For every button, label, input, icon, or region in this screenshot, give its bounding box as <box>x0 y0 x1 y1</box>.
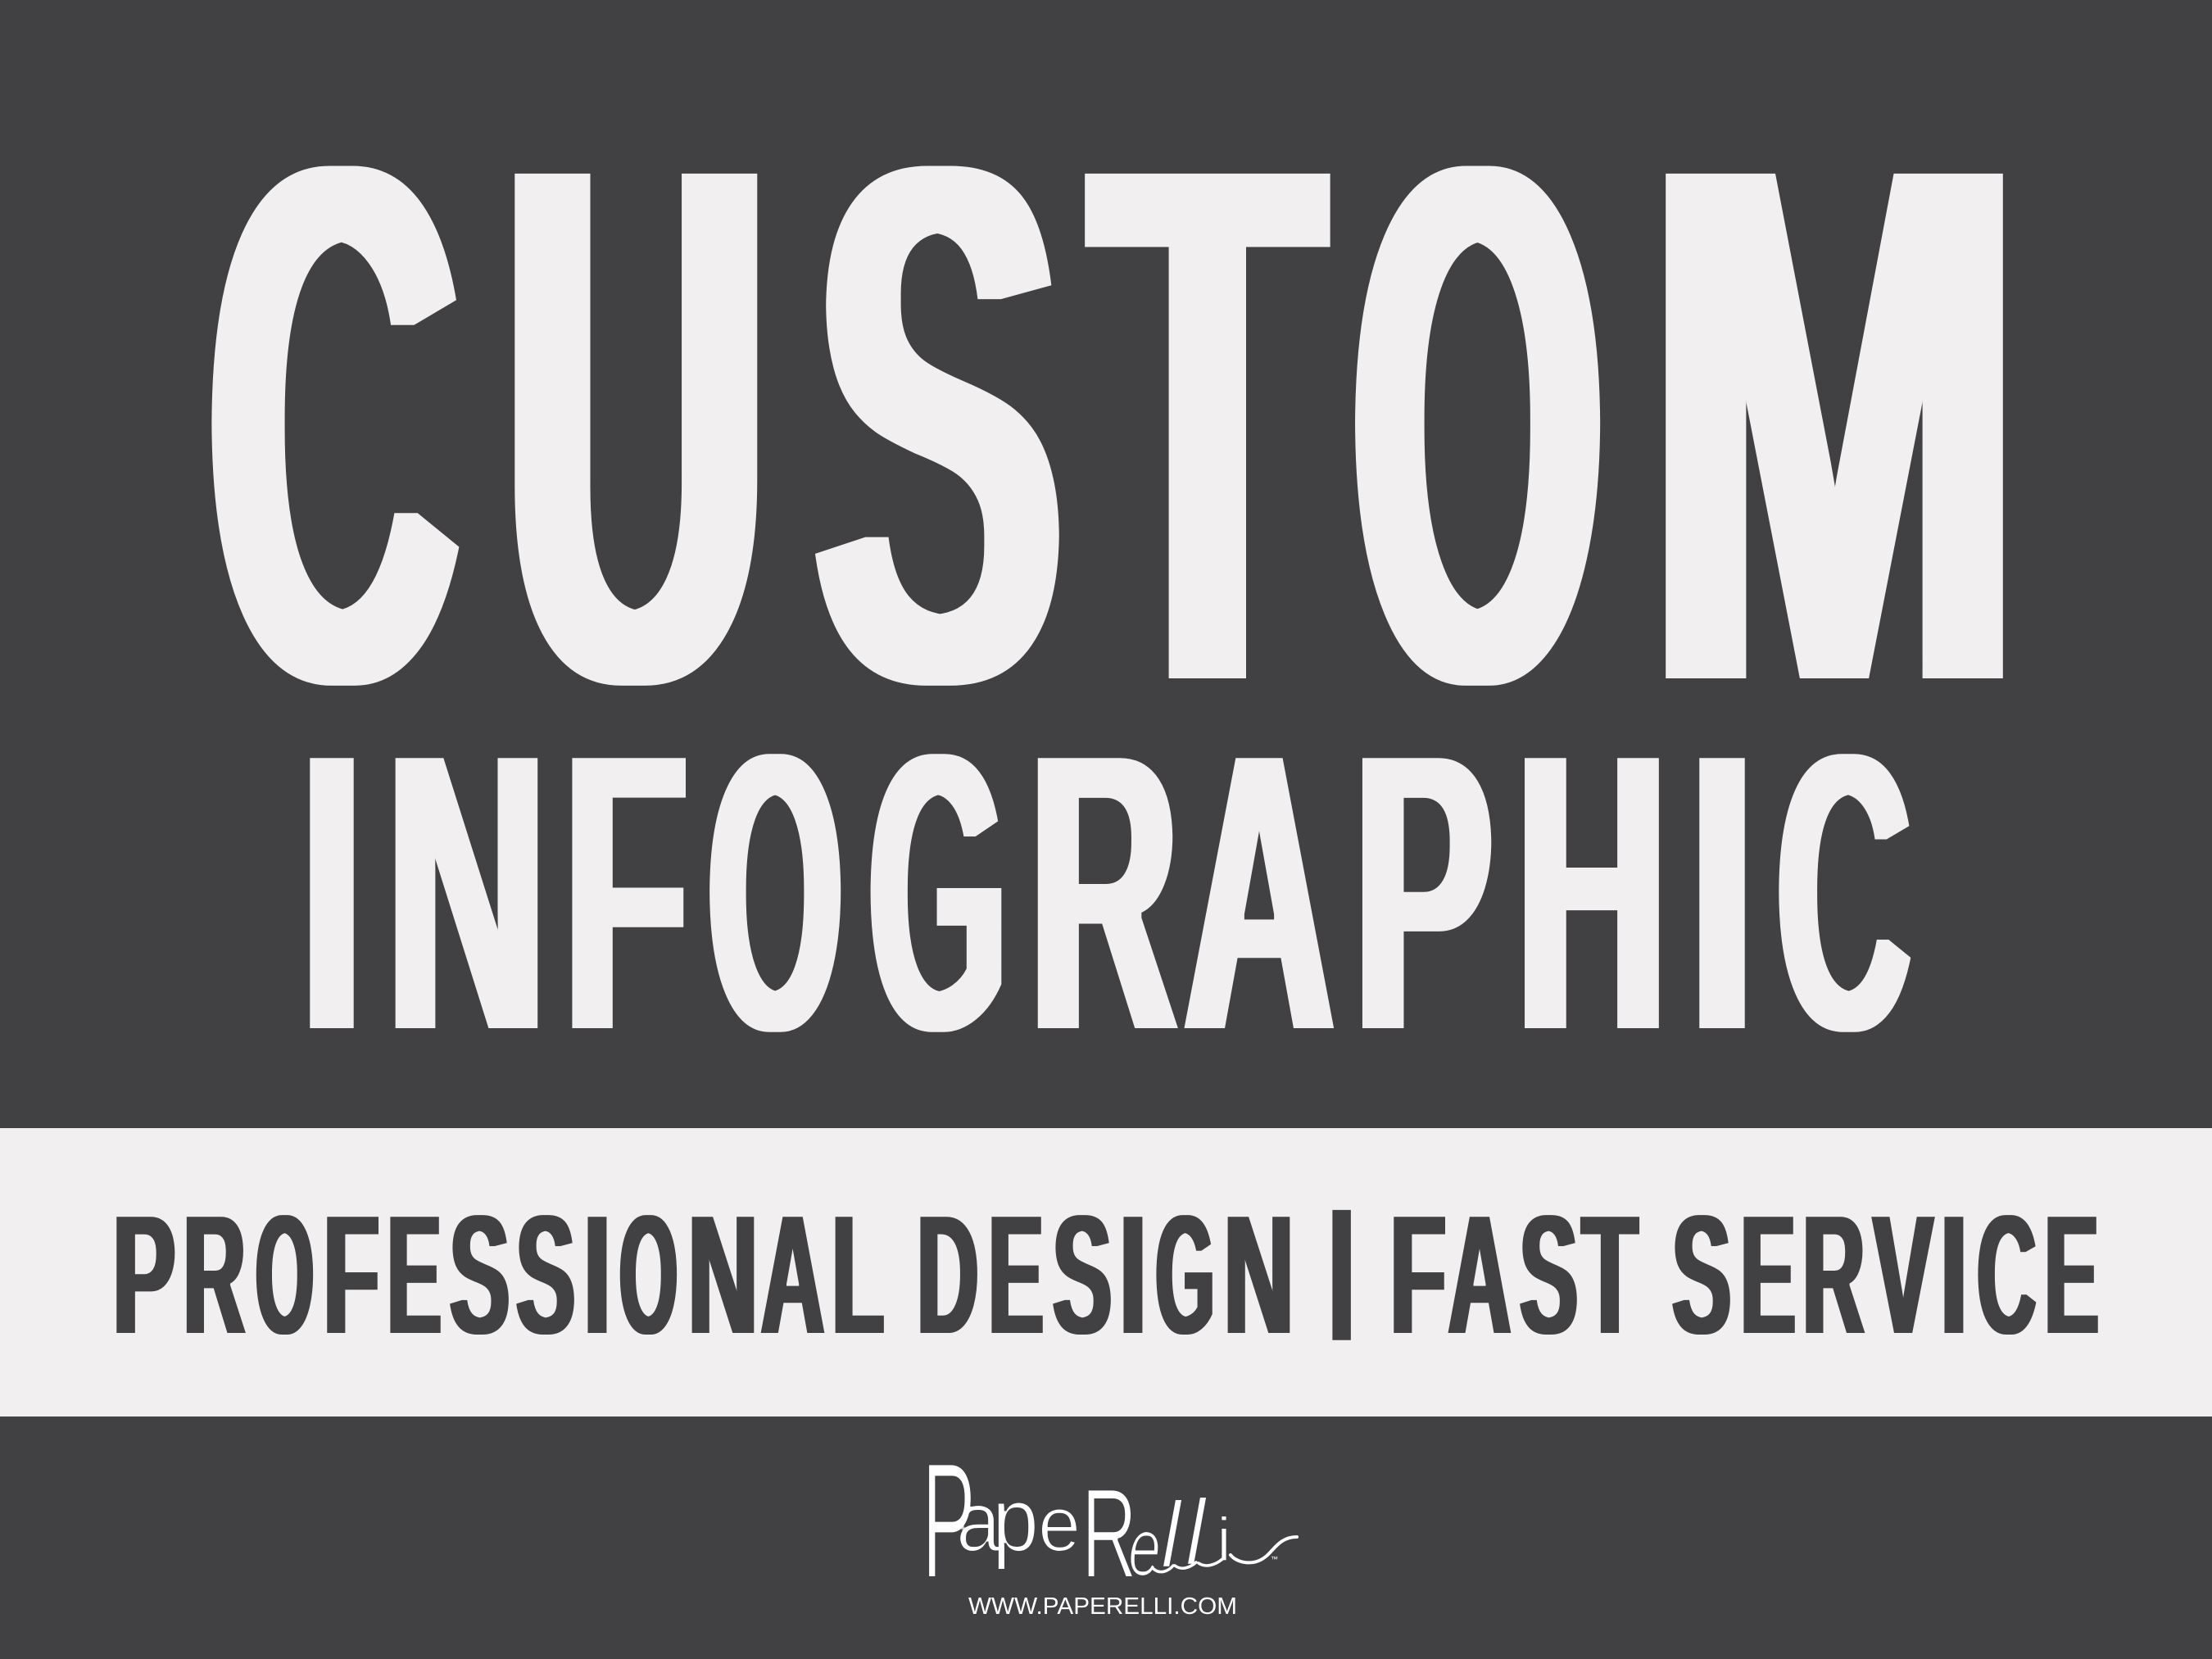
tagline: professional design, fast service: F <box>324 1180 379 1371</box>
logo swash <box>1231 1537 1297 1562</box>
tagline: professional design, fast service: E <box>989 1180 1044 1371</box>
heading: CUSTOM: O <box>1353 7 1602 842</box>
tagline: professional design, fast service: A <box>1448 1180 1511 1371</box>
logo wordmark: l <box>1185 1481 1208 1585</box>
tagline: professional design, fast service: S <box>450 1180 510 1371</box>
tagline: professional design, fast service: A <box>761 1180 825 1371</box>
logo wordmark: i <box>1217 1505 1231 1575</box>
tagline: professional design, fast service: N <box>688 1180 758 1371</box>
website url: WWW.PAPERELLI.COM <box>968 1593 1237 1620</box>
logo wordmark: P <box>922 1430 976 1612</box>
tagline: professional design, fast service: N <box>1224 1180 1294 1371</box>
infographic canvas: C <box>1777 669 1911 1116</box>
tagline: professional design, fast service: I <box>584 1180 610 1371</box>
logo wordmark: p <box>992 1470 1039 1571</box>
tagline: professional design, fast service: F <box>1390 1180 1446 1371</box>
tagline: professional design, fast service: R <box>1802 1180 1865 1371</box>
infographic canvas: E <box>2045 1180 2099 1371</box>
heading: INFOGRAPHIC: O <box>708 669 842 1116</box>
logo connecting strokes <box>1154 1559 1222 1572</box>
tagline: professional design, fast service: I <box>1120 1180 1146 1371</box>
heading: INFOGRAPHIC: P <box>1354 669 1493 1116</box>
tagline: professional design, fast service: S <box>1672 1180 1731 1371</box>
heading: CUSTOM: S <box>814 7 1062 842</box>
trademark mark: ™ <box>1271 1555 1278 1563</box>
tagline: professional design, fast service: L <box>832 1180 882 1371</box>
heading: INFOGRAPHIC: F <box>564 669 687 1116</box>
heading: CUSTOM: T <box>1092 7 1323 842</box>
tagline: professional design, fast service: P <box>113 1180 175 1371</box>
heading: INFOGRAPHIC: I <box>1689 669 1755 1116</box>
heading: CUSTOM: C <box>209 7 459 842</box>
heading: INFOGRAPHIC: N <box>387 669 547 1116</box>
heading: CUSTOM: U <box>505 7 768 842</box>
logo wordmark: a <box>956 1475 1001 1570</box>
light band <box>0 1128 2212 1416</box>
tagline: professional design, fast service: T <box>1582 1180 1638 1371</box>
logo wordmark: e <box>1128 1502 1161 1593</box>
tagline: professional design, fast service: S <box>516 1180 575 1371</box>
tagline: professional design, fast service: S <box>1520 1180 1578 1371</box>
tagline: professional design, fast service: G <box>1156 1180 1214 1371</box>
tagline: professional design, fast service: S <box>1053 1180 1112 1371</box>
logo wordmark: l <box>1161 1484 1183 1588</box>
tagline: professional design, fast service: I <box>1941 1180 1967 1371</box>
logo wordmark: e <box>1038 1480 1081 1568</box>
heading: INFOGRAPHIC: A <box>1184 669 1335 1116</box>
heading: INFOGRAPHIC: G <box>869 669 1007 1116</box>
tagline: professional design, fast service: R <box>184 1180 246 1371</box>
tagline: professional design, fast service: O <box>619 1180 678 1371</box>
heading: INFOGRAPHIC: H <box>1516 669 1667 1116</box>
heading: INFOGRAPHIC: I <box>301 669 363 1116</box>
tagline: professional design, fast service: | <box>1327 1185 1357 1341</box>
tagline: professional design, fast service: O <box>256 1180 314 1371</box>
tagline: professional design, fast service: D <box>918 1180 978 1371</box>
logo: PapeRelli <box>922 1430 1297 1612</box>
heading: INFOGRAPHIC: R <box>1030 669 1178 1116</box>
tagline: professional design, fast service: C <box>1977 1180 2037 1371</box>
tagline: professional design, fast service: V <box>1873 1180 1933 1371</box>
tagline: professional design, fast service: E <box>1741 1180 1796 1371</box>
tagline: professional design, fast service: E <box>388 1180 442 1371</box>
logo wordmark: R <box>1081 1462 1137 1604</box>
